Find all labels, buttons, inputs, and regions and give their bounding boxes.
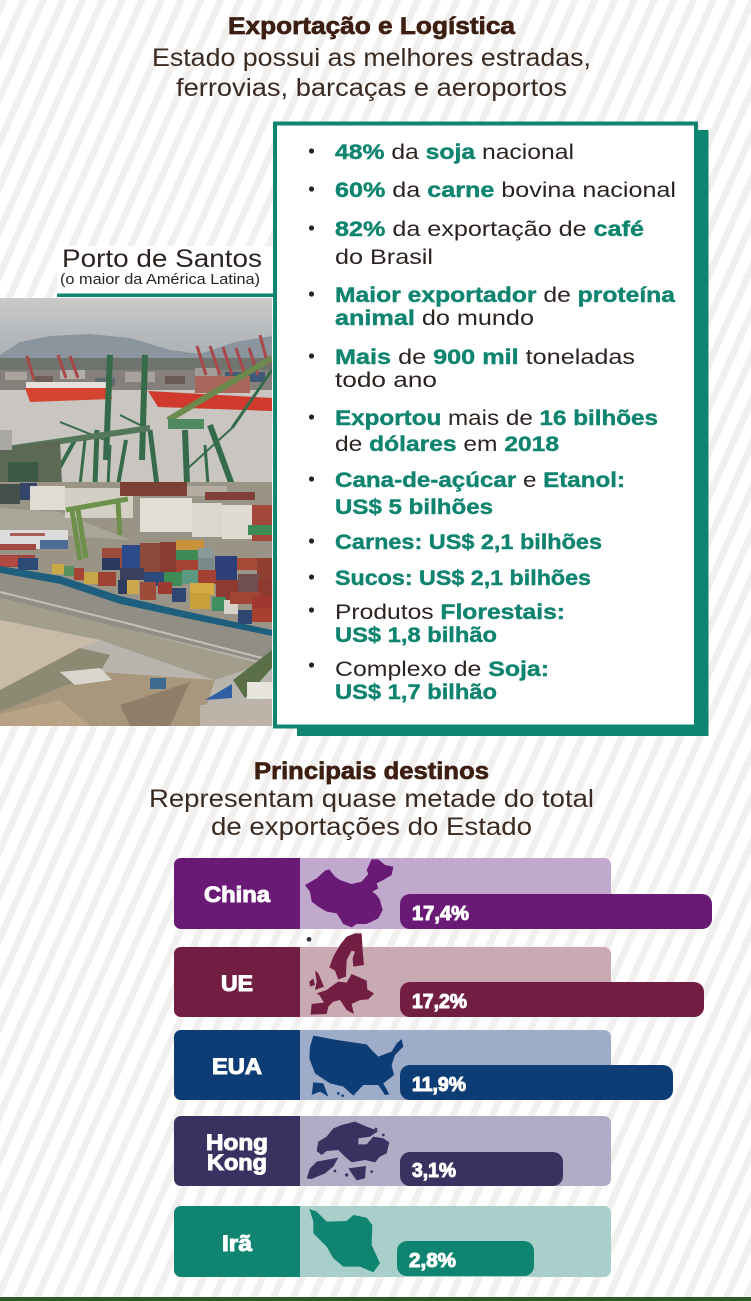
yard	[0, 482, 272, 640]
bar: Hong Kong 3,1%: Kong	[207, 1150, 267, 1175]
bottom green strip	[0, 1297, 751, 1301]
subtitle	[152, 44, 591, 102]
quay blue band	[0, 566, 272, 636]
bullet list: Sucos: US$ 2,1 bilhões	[335, 566, 591, 590]
bar: Irã 2,8%: Irã	[222, 1231, 253, 1256]
green gantry	[66, 499, 128, 560]
subheading: destinations	[149, 785, 594, 841]
panel: export facts	[275, 124, 708, 736]
title: Exportação e Logística	[228, 13, 516, 40]
bullet list: Maior exportador de proteína	[335, 283, 676, 307]
bar: Hong Kong 3,1%	[174, 1116, 611, 1186]
distant red cranes	[27, 335, 268, 380]
bar: Irã 2,8%	[174, 1206, 611, 1277]
heading: Principais destinos: Principais destinos	[254, 758, 489, 785]
bullet list: Mais de 900 mil toneladas	[335, 345, 635, 369]
map: Europe	[307, 933, 374, 1015]
bullet list: 60% da carne bovina nacional	[335, 178, 676, 202]
panel shadow	[297, 130, 708, 736]
map: USA	[309, 1036, 403, 1097]
subtitle: ferrovias, barcaças e aeroportos	[176, 74, 567, 102]
red ships	[25, 376, 272, 411]
subheading: destinations: de exportações do Estado	[211, 813, 532, 841]
map: China	[305, 859, 393, 927]
bullet list	[309, 140, 676, 704]
bar: China 17,4%: 17,4%	[412, 903, 469, 925]
bullet list: animal do mundo	[335, 306, 534, 330]
bullet list: Carnes: US$ 2,1 bilhões	[335, 530, 602, 554]
bullet list: do Brasil	[335, 245, 433, 269]
bar: EUA 11,9%: EUA	[212, 1054, 262, 1079]
map: Iran	[309, 1209, 380, 1272]
bullet list: 82% da exportação de café	[335, 217, 644, 241]
green cranes	[0, 355, 272, 486]
photo: port of Santos	[0, 298, 272, 726]
bar: China 17,4%	[174, 858, 712, 929]
bar: UE 17,2%: UE	[221, 971, 253, 996]
caption: Porto de Santos	[57, 245, 273, 298]
panel border	[275, 124, 696, 726]
bullet list: Produtos Florestais:	[335, 600, 565, 624]
bar: UE 17,2%: 17,2%	[412, 991, 467, 1013]
white containers	[0, 482, 272, 567]
bar: China 17,4%: China	[204, 882, 271, 907]
bullet list: US$ 5 bilhões	[335, 495, 493, 519]
bar: UE 17,2%	[174, 933, 704, 1017]
bar: EUA 11,9%	[174, 1030, 673, 1100]
bullet list: 48% da soja nacional	[335, 140, 574, 164]
bar: Hong Kong 3,1%: 3,1%	[412, 1160, 456, 1182]
map: Hong Kong	[307, 1122, 389, 1180]
subtitle: Estado possui as melhores estradas,	[152, 44, 591, 72]
bar: EUA 11,9%: 11,9%	[412, 1074, 466, 1096]
bullet list: todo ano	[335, 368, 437, 392]
bullet list: Complexo de Soja:	[335, 657, 549, 681]
bullet list: US$ 1,8 bilhão	[335, 623, 497, 647]
caption: Porto de Santos: (o maior da América Latina)	[60, 272, 260, 288]
subheading: destinations: Representam quase metade do total	[149, 785, 594, 813]
bar: Irã 2,8%: 2,8%	[409, 1250, 456, 1272]
bullet list: Cana-de-açúcar e Etanol:	[335, 468, 625, 492]
coloured containers	[0, 540, 272, 624]
road	[0, 573, 272, 664]
bullet list: de dólares em 2018	[335, 432, 559, 456]
bottom dusty land	[0, 598, 262, 680]
caption: Porto de Santos: Porto de Santos	[62, 245, 262, 273]
bullet list: Exportou mais de 16 bilhões	[335, 406, 658, 430]
bar: Hong Kong 3,1%: Hong	[206, 1130, 268, 1155]
bullet list: US$ 1,7 bilhão	[335, 680, 497, 704]
left dark crane cluster	[0, 430, 62, 485]
